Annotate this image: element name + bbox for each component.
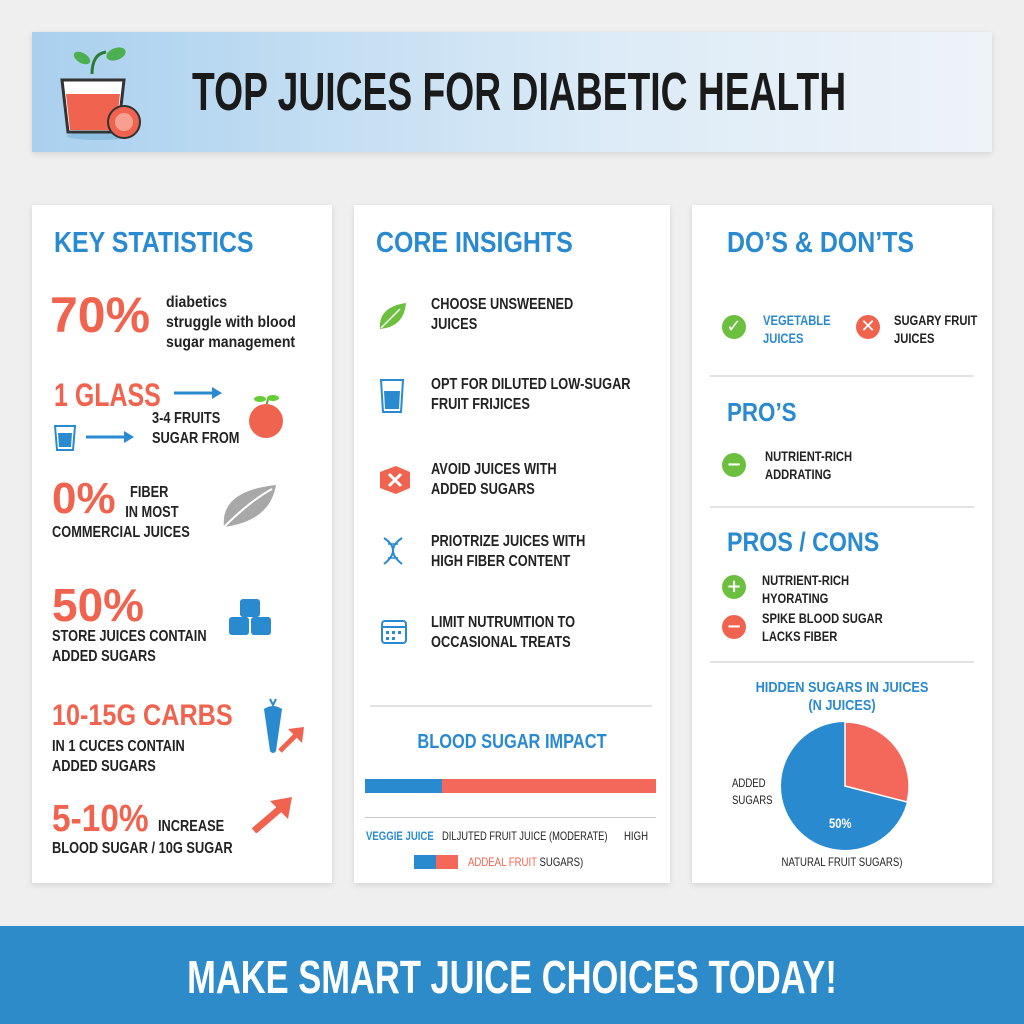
heading: CORE INSIGHTS <box>376 227 573 259</box>
do/don't items: ✓ <box>726 316 742 337</box>
do/don't items: JUICES <box>894 330 934 346</box>
insight 5 <box>381 614 575 651</box>
pie chart: hidden sugars: SUGARS <box>732 793 773 807</box>
insight 1: JUICES <box>431 316 477 333</box>
stat 70%: 70% <box>50 287 150 343</box>
insight 4: HIGH FIBER CONTENT <box>431 553 570 570</box>
pie chart: hidden sugars: HIDDEN SUGARS IN JUICES <box>756 679 928 696</box>
heading: DO’S & DON’TS <box>727 227 914 259</box>
stat 1 glass: SUGAR FROM <box>152 430 239 447</box>
chart: blood sugar impact <box>365 731 656 869</box>
icon: carrot <box>264 698 282 753</box>
stat carbs: 10-15G CARBS <box>52 699 233 732</box>
heading: KEY STATISTICS <box>54 227 254 259</box>
title: TOP JUICES FOR DIABETIC HEALTH <box>192 62 846 122</box>
stat 0% <box>52 474 276 541</box>
footer banner: MAKE SMART JUICE CHOICES TODAY! <box>187 951 837 1003</box>
chart: blood sugar impact: VEGGIE JUICE <box>366 829 434 843</box>
panel: do's and don'ts: HYORATING <box>762 590 828 606</box>
footer banner <box>0 926 1024 1024</box>
chart: blood sugar impact: ADDEAL FRUIT SUGARS) <box>468 855 583 869</box>
panel: key statistics <box>32 205 332 883</box>
panel: do's and don'ts: + <box>726 576 742 597</box>
stat carbs <box>52 698 304 775</box>
do/don't items: SUGARY FRUIT <box>894 312 977 328</box>
stat 1 glass: 1 GLASS <box>54 377 161 413</box>
stat 50%: ADDED SUGARS <box>52 648 156 665</box>
panel: do's and don'ts: − <box>726 454 742 475</box>
do/don't items <box>722 312 978 346</box>
insight 3: AVOID JUICES WITH <box>431 461 557 478</box>
pie chart: hidden sugars: (N JUICES) <box>808 697 876 714</box>
do/don't items: ✕ <box>860 316 876 337</box>
insight 5: LIMIT NUTRUMTION TO <box>431 614 575 631</box>
do/don't items: JUICES <box>763 330 803 346</box>
stat carbs: IN 1 CUCES CONTAIN <box>52 738 185 755</box>
insight 1: CHOOSE UNSWEENED <box>431 296 573 313</box>
insight 4: PRIOTRIZE JUICES WITH <box>431 533 585 550</box>
panel: do's and don'ts <box>692 205 992 883</box>
stat 5-10%: BLOOD SUGAR / 10G SUGAR <box>52 840 233 857</box>
pie chart: hidden sugars: 50% <box>829 815 851 831</box>
panel: core insights <box>354 205 670 883</box>
do/don't items: VEGETABLE <box>763 312 831 328</box>
stat 5-10% <box>52 797 292 857</box>
stat 50%: STORE JUICES CONTAIN <box>52 628 207 645</box>
insight 5: OCCASIONAL TREATS <box>431 634 571 651</box>
stat 50%: 50% <box>52 579 144 631</box>
icon: sugar cubes <box>229 599 271 635</box>
panel: do's and don'ts: NUTRIENT-RICH <box>762 572 849 588</box>
stat 70% <box>50 287 296 351</box>
stat 1 glass <box>54 377 283 451</box>
pie chart: hidden sugars: ADDED <box>732 776 766 790</box>
icon: juice glass <box>60 47 141 140</box>
stat 1 glass: 3-4 FRUITS <box>152 410 220 427</box>
insight 4 <box>383 533 585 570</box>
chart: blood sugar impact: DILJUTED FRUIT JUICE (MODERATE) <box>442 829 608 843</box>
pie chart: hidden sugars <box>732 679 928 869</box>
pie chart: hidden sugars: NATURAL FRUIT SUGARS) <box>782 855 902 869</box>
stat 70%: diabetics <box>166 294 227 311</box>
panel: do's and don'ts: NUTRIENT-RICH <box>765 448 852 464</box>
stat carbs: ADDED SUGARS <box>52 758 156 775</box>
icon: apple <box>249 395 283 438</box>
insight 2: FRUIT FRIJICES <box>431 396 530 413</box>
stat 0%: 0% <box>52 474 116 523</box>
stat 70%: struggle with blood <box>166 314 296 331</box>
insight 2: OPT FOR DILUTED LOW-SUGAR <box>431 376 631 393</box>
stat 50% <box>52 579 271 665</box>
stat 5-10%: 5-10% <box>52 798 149 840</box>
header banner <box>32 32 992 152</box>
stat 0%: FIBER <box>130 484 168 501</box>
panel: do's and don'ts: ADDRATING <box>765 466 831 482</box>
insight 3: ADDED SUGARS <box>431 481 535 498</box>
insight 1 <box>380 296 573 333</box>
heading: pros/cons: PROS / CONS <box>727 527 879 557</box>
panel: do's and don'ts: LACKS FIBER <box>762 628 837 644</box>
panel: do's and don'ts: SPIKE BLOOD SUGAR <box>762 610 883 626</box>
panel: do's and don'ts: − <box>726 616 742 637</box>
stat 5-10%: INCREASE <box>158 818 224 835</box>
insight 2 <box>380 376 631 413</box>
stat 0%: IN MOST <box>125 504 179 521</box>
stat 70%: sugar management <box>166 334 295 351</box>
icon: leaf <box>224 485 276 527</box>
chart: blood sugar impact: HIGH <box>624 829 648 843</box>
insight 3 <box>380 461 557 498</box>
stat 0%: COMMERCIAL JUICES <box>52 524 190 541</box>
heading: pro's: PRO’S <box>727 397 797 427</box>
chart: blood sugar impact: BLOOD SUGAR IMPACT <box>417 731 607 753</box>
